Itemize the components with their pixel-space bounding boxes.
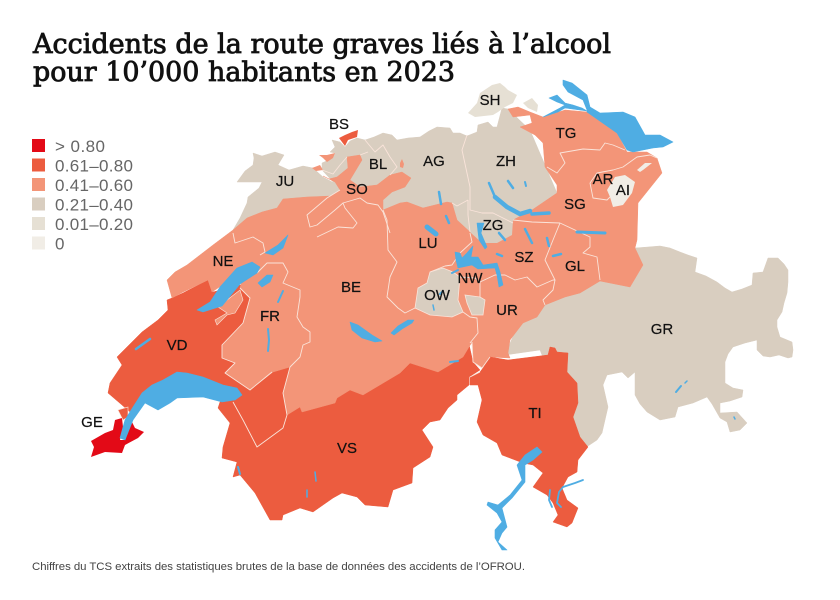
title: pour 10’000 habitants en 2023 [33, 56, 455, 88]
canton labels: VD [167, 337, 188, 354]
canton labels: NE [213, 253, 233, 270]
map of Swiss cantons [81, 80, 793, 550]
title [32, 28, 611, 88]
region: SH [468, 83, 538, 117]
canton labels: SO [346, 181, 368, 198]
lake: Lucerne [455, 246, 503, 287]
source note: Chiffres du TCS extraits des statistiques brutes de la base de données des accidents de l’OFROU. [32, 561, 525, 573]
region: VD enclave near GE [118, 407, 128, 420]
region: GR [505, 246, 793, 448]
canton labels: OW [424, 287, 451, 304]
legend: 0.41–0.60 [55, 176, 133, 195]
region: canton borders [222, 135, 657, 447]
canton labels: VS [337, 440, 357, 457]
canton labels [81, 92, 673, 457]
canton labels: BE [341, 279, 361, 296]
legend: 0 [55, 234, 64, 254]
region: TI [470, 347, 588, 527]
legend: 0.61–0.80 [55, 156, 133, 176]
small lakes [136, 181, 735, 497]
canton labels: LU [418, 235, 438, 252]
legend: 0.01–0.20 [55, 215, 133, 234]
lake: Thun [350, 322, 382, 342]
legend: 0.21–0.40 [55, 196, 133, 214]
canton labels: SG [564, 196, 586, 213]
region: JU [233, 152, 340, 230]
canton labels: TG [556, 125, 576, 142]
canton labels: JU [276, 173, 294, 190]
region: salmon cantons [167, 107, 662, 415]
legend [32, 137, 133, 254]
region: OW enclave [465, 295, 485, 315]
canton labels: TI [528, 405, 542, 422]
canton labels: SZ [514, 249, 534, 266]
canton labels: AI [616, 182, 630, 199]
canton labels: ZG [483, 217, 503, 234]
canton labels: GL [565, 258, 585, 275]
canton labels: AR [593, 171, 614, 188]
lake: Brienz [391, 320, 414, 335]
canton labels: BS [329, 116, 349, 133]
region: VD and VS [108, 280, 480, 520]
region: OW [415, 268, 463, 317]
canton labels: GE [81, 414, 103, 431]
lake: Maggiore [487, 447, 542, 550]
lake: Murten [258, 275, 273, 287]
lake: Untersee [543, 95, 587, 117]
lake: Zug [477, 223, 487, 249]
canton labels: BL [369, 156, 387, 173]
canton labels: GR [651, 321, 673, 338]
region: SO exclaves [312, 153, 404, 171]
lake: Biel [265, 235, 288, 255]
canton labels: NW [458, 270, 483, 287]
legend: > 0.80 [55, 137, 105, 156]
title: Accidents de la route graves liés à l’alcool [32, 28, 611, 60]
lake: Constance [563, 80, 673, 152]
region: BL AG ZH ZG [322, 108, 560, 250]
canton labels: SH [480, 92, 500, 109]
canton labels: UR [496, 302, 518, 319]
lake: Neuchâtel [197, 262, 260, 312]
canton labels: FR [260, 308, 280, 325]
region: BS [339, 130, 358, 146]
lake: Geneva [120, 372, 242, 440]
region: Broye enclave [215, 290, 243, 325]
region: ZG [470, 212, 513, 243]
lake: Lugano [549, 480, 583, 507]
canton labels: ZH [496, 153, 516, 170]
region: AI [607, 163, 652, 207]
canton labels: AG [423, 153, 445, 170]
region: GE [91, 418, 144, 457]
